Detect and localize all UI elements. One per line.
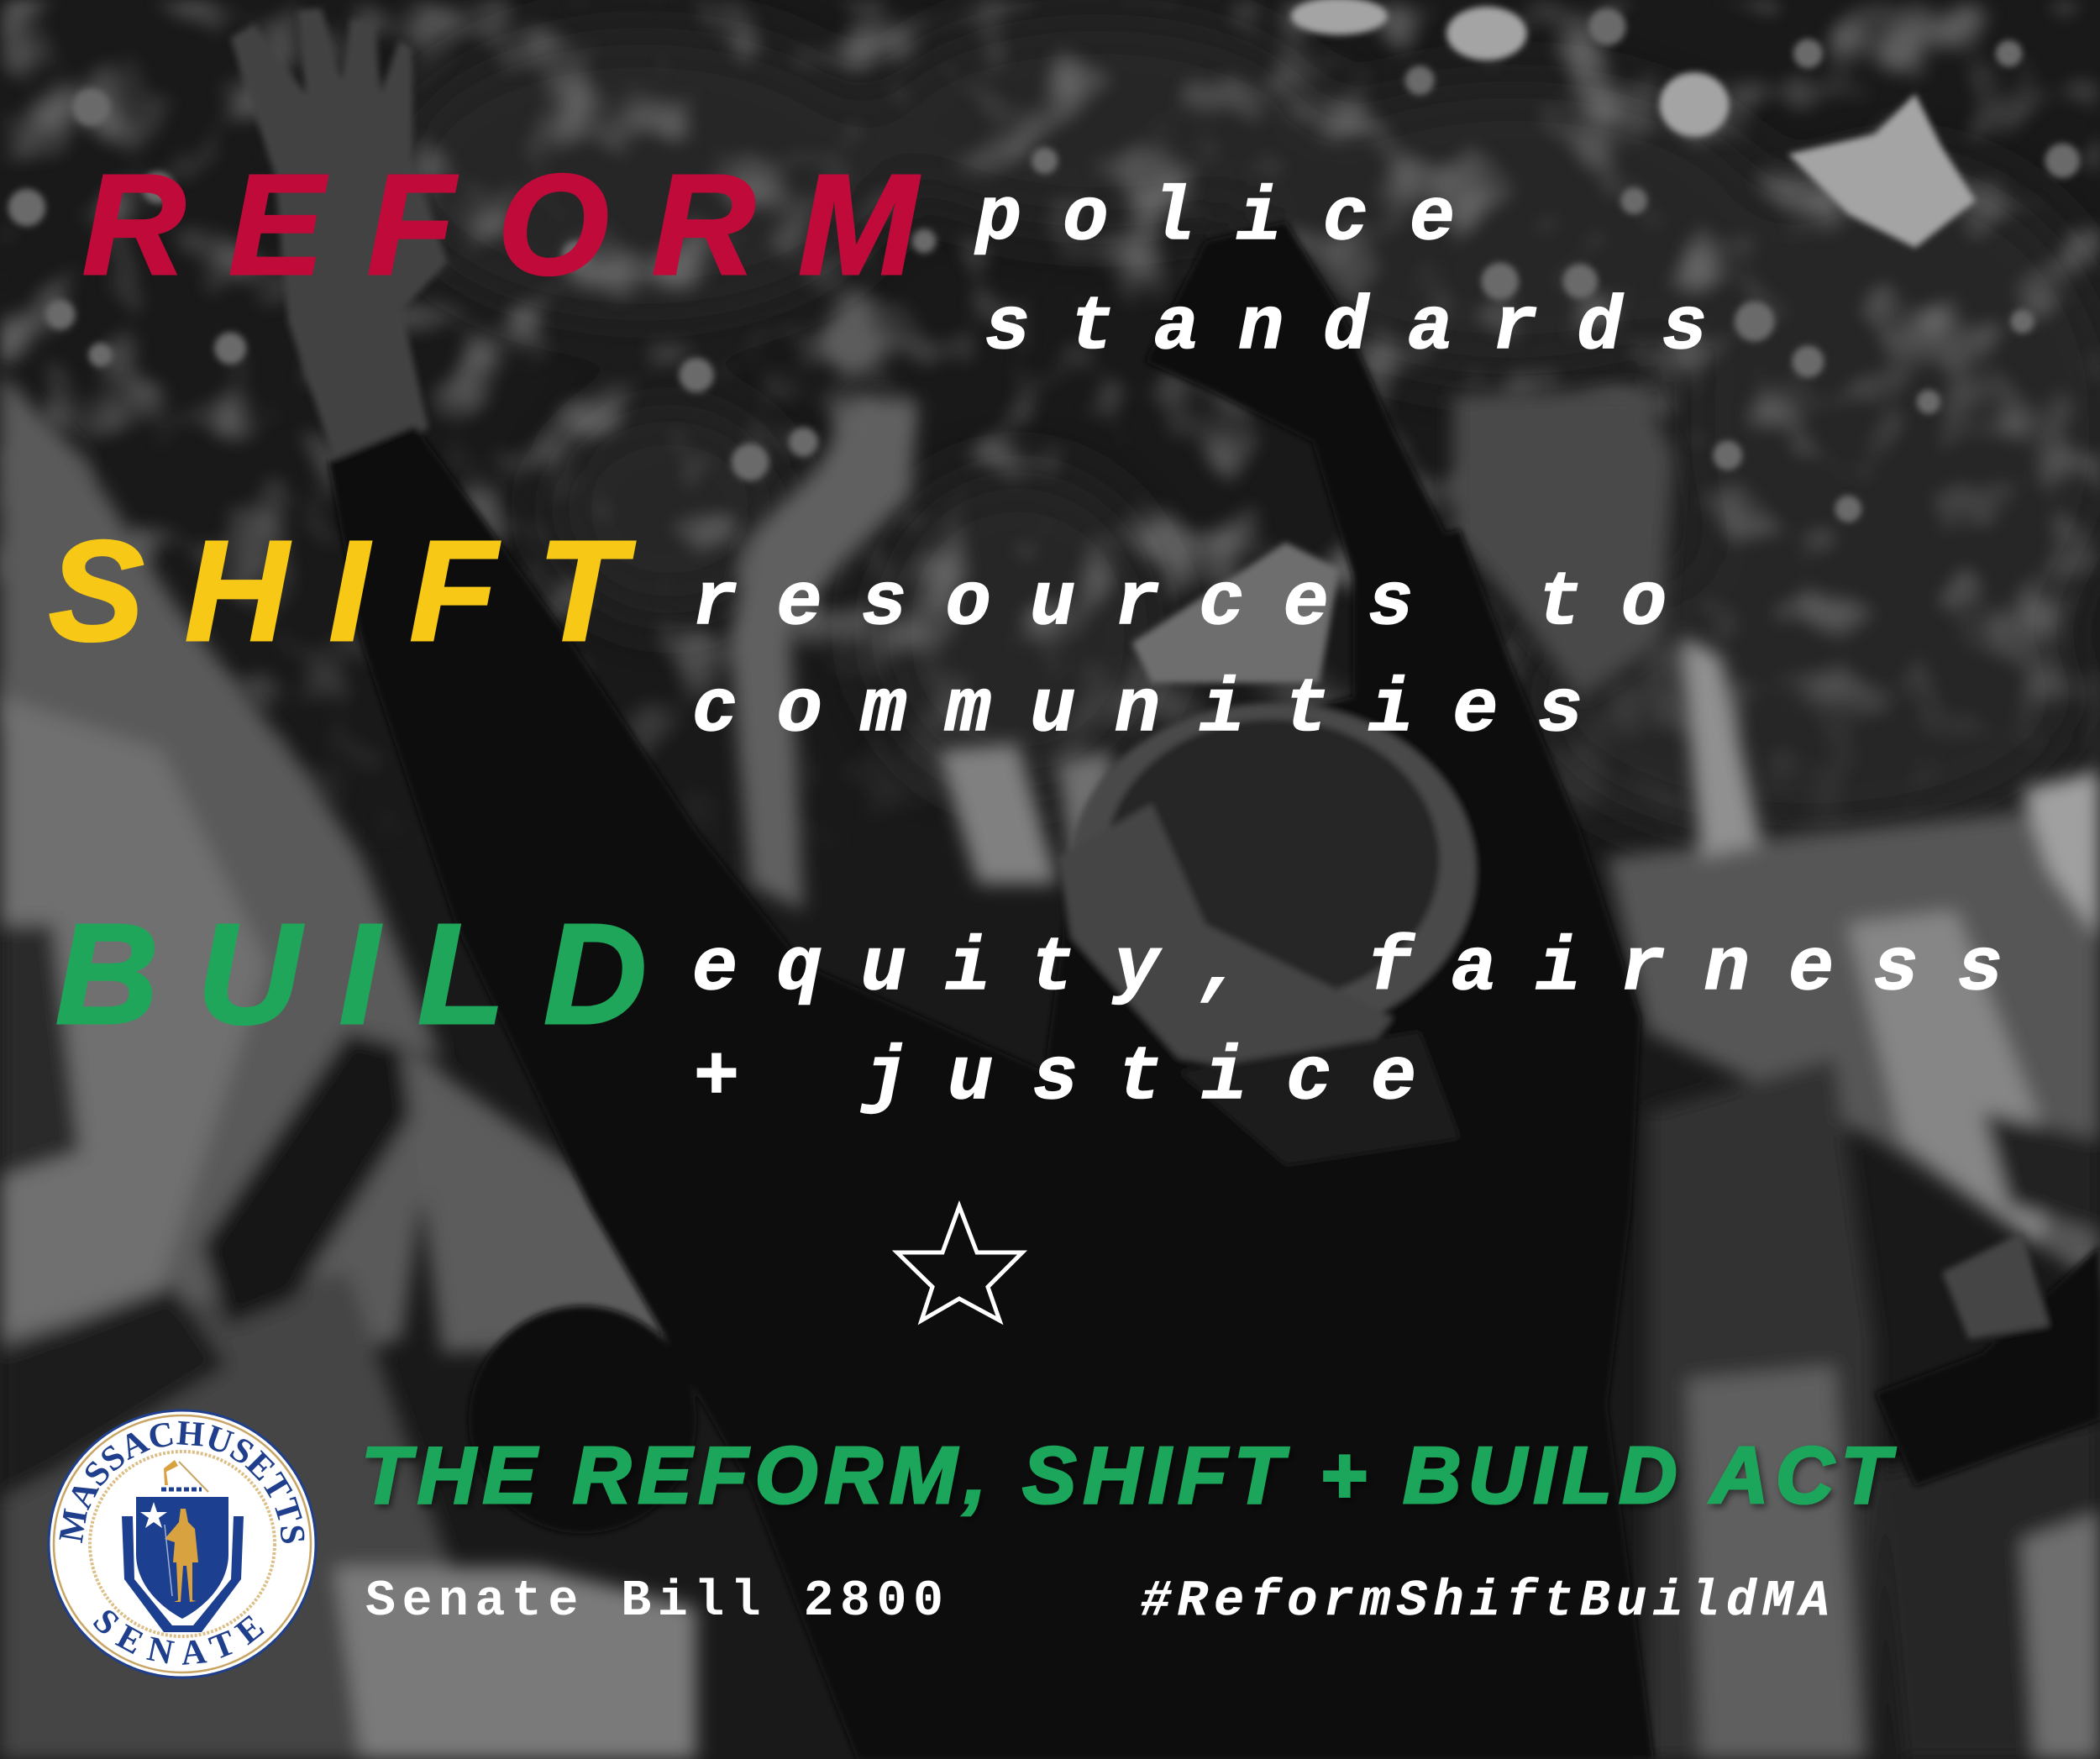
shirt strap <box>201 1032 449 1326</box>
heading: SHIFT: SHIFT <box>49 512 635 671</box>
hair of girl <box>469 1306 696 1534</box>
text: hashtag: #ReformShiftBuildMA <box>1141 1573 1830 1630</box>
seal shield <box>136 1497 228 1619</box>
head with scarf <box>1068 703 1476 1038</box>
seal figure <box>165 1509 198 1602</box>
seal ribbon <box>122 1516 244 1632</box>
seal crest arm and sword <box>161 1460 208 1492</box>
left raised arm and hand with fingers <box>230 8 448 462</box>
girl in foreground <box>335 1567 696 1759</box>
mid crowd <box>402 1045 696 1352</box>
seal lettering top: MASSACHUSETTS <box>59 1421 304 1544</box>
mid raised arm <box>730 395 917 911</box>
text: police standards: police <box>974 176 1455 262</box>
text: equity, fairness + justice: + justice <box>694 1036 1416 1121</box>
text: resources to communities <box>692 561 1667 753</box>
heading: BUILD: BUILD <box>55 895 647 1054</box>
text: Senate Bill 2800: Senate Bill 2800 <box>365 1573 943 1630</box>
foliage texture <box>0 0 2100 857</box>
seal lettering bottom: SENATE <box>93 1610 265 1665</box>
text: police standards: standards <box>984 286 1707 371</box>
central figure with dark jacket <box>328 426 1654 1759</box>
left figure in light shirt <box>0 372 442 1393</box>
icon: star outline <box>897 1206 1022 1321</box>
text: equity, fairness + justice <box>692 927 2003 1121</box>
tree canopy tones <box>388 13 2100 843</box>
text: equity, fairness + justice: equity, fairness <box>692 927 2003 1012</box>
right side crowd <box>1607 804 2100 1286</box>
protest sign, upper right <box>1453 388 1674 696</box>
seal: Massachusetts Senate <box>47 1410 318 1678</box>
text: resources to communities: communities <box>692 668 1583 753</box>
water bottle <box>1131 543 1339 683</box>
text: police standards <box>974 176 1707 371</box>
title: The Reform, Shift + Build Act: THE REFORM, SHIFT + BUILD ACT <box>361 1431 1896 1520</box>
heading: REFORM: REFORM <box>82 145 920 305</box>
seal star <box>140 1502 167 1528</box>
text: resources to communities: resources to <box>692 561 1667 647</box>
camera <box>1875 1246 2100 1487</box>
right raised arm <box>1145 221 1446 576</box>
bokeh highlights <box>8 0 2080 522</box>
